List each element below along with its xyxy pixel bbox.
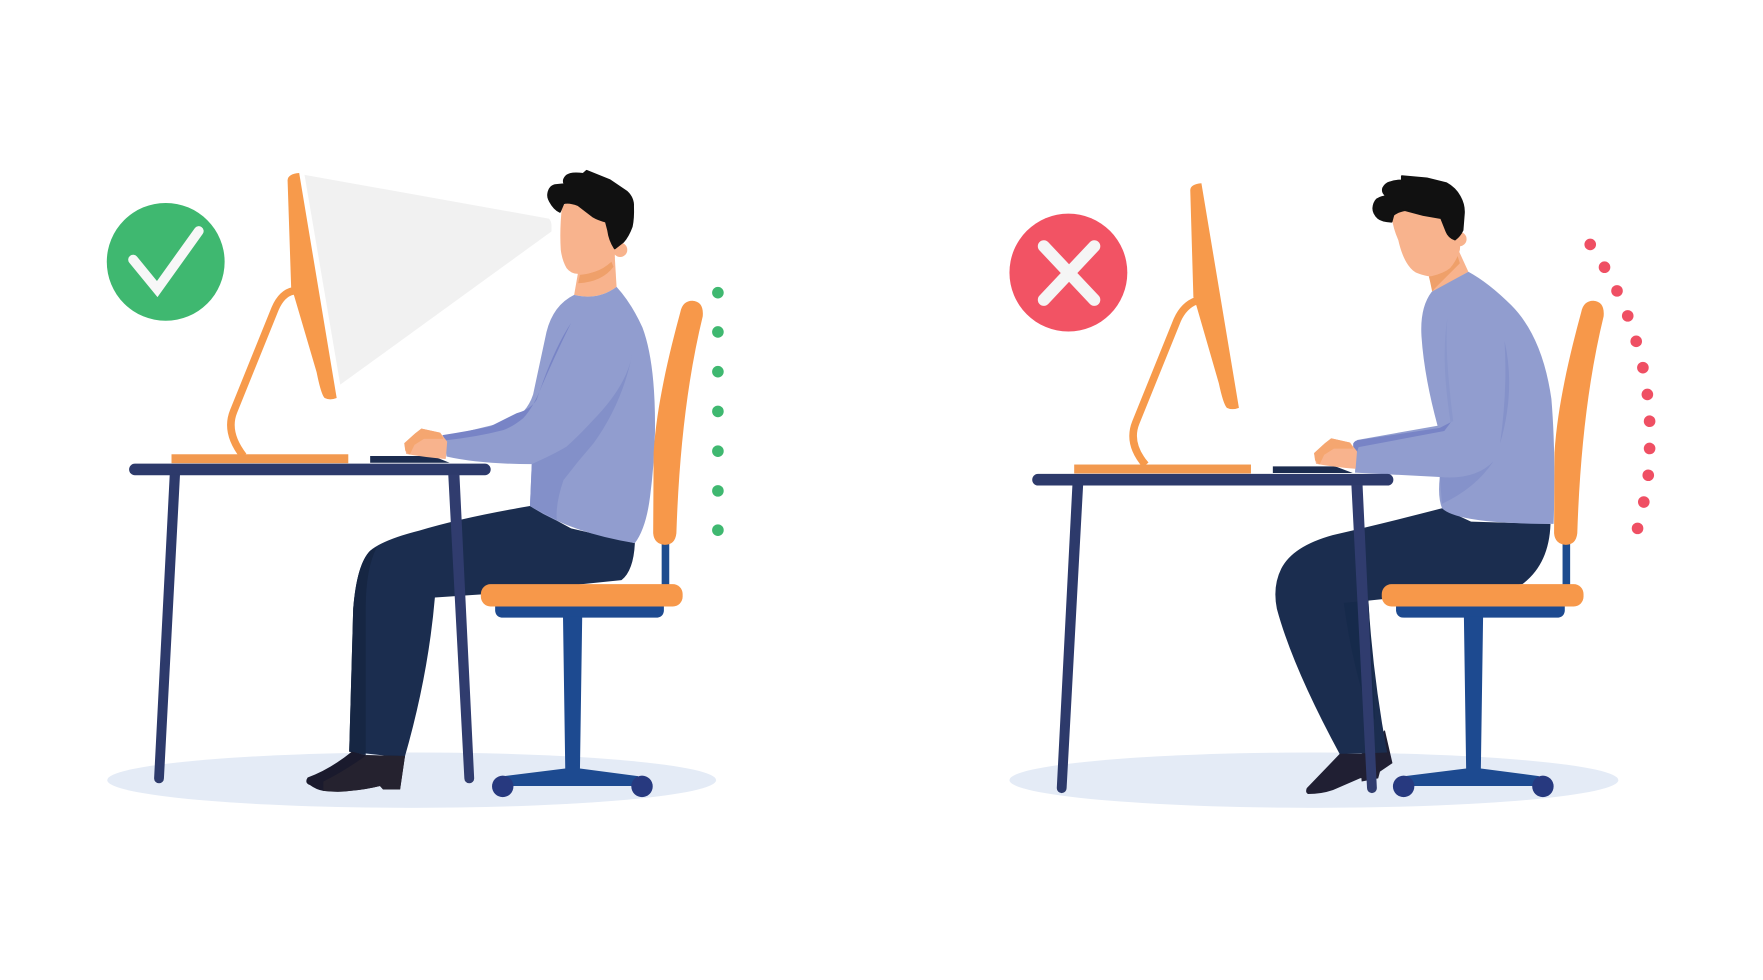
panel: incorrect posture bbox=[1009, 176, 1655, 808]
desk bbox=[129, 464, 491, 783]
office chair bbox=[1382, 301, 1604, 797]
sleeve shade bbox=[442, 323, 571, 440]
face bbox=[1392, 198, 1462, 276]
hair bbox=[548, 171, 633, 248]
hair bbox=[1373, 176, 1464, 240]
front shoe bbox=[1306, 754, 1378, 794]
neck shadow bbox=[1429, 253, 1460, 292]
shirt bbox=[1355, 272, 1554, 524]
keyboard bbox=[1273, 466, 1353, 473]
seated person, upright bbox=[306, 171, 655, 792]
shaded far leg bbox=[349, 547, 377, 755]
gaze cone from eyes to screen bbox=[305, 175, 552, 385]
sleeve shade bbox=[1353, 422, 1451, 452]
hands bbox=[1315, 439, 1356, 468]
icon: red cross badge bbox=[1009, 214, 1127, 332]
curved spine dots bbox=[1584, 239, 1655, 534]
shirt bbox=[444, 287, 655, 543]
keyboard bbox=[370, 456, 450, 463]
ground shadow bbox=[107, 752, 716, 808]
torso shade bbox=[530, 354, 632, 520]
far shoe bbox=[1359, 730, 1392, 781]
face bbox=[560, 198, 616, 274]
ear bbox=[613, 243, 627, 257]
torso shade bbox=[1440, 461, 1493, 504]
front shoe bbox=[323, 755, 405, 792]
computer monitor bbox=[172, 173, 348, 463]
panel: correct posture bbox=[107, 171, 724, 808]
ground shadow bbox=[1009, 752, 1618, 808]
trousers bbox=[1275, 508, 1550, 754]
hands bbox=[405, 429, 446, 458]
seated person, slouching bbox=[1275, 176, 1554, 794]
shaded far leg bbox=[1344, 601, 1375, 720]
shoes bbox=[306, 752, 405, 792]
desk bbox=[1032, 474, 1393, 793]
office chair bbox=[481, 301, 703, 797]
neck shadow bbox=[578, 260, 613, 283]
neck bbox=[574, 257, 617, 297]
icon: green check badge bbox=[107, 203, 225, 321]
neck bbox=[1426, 249, 1468, 292]
computer monitor bbox=[1074, 183, 1251, 473]
ear bbox=[1452, 232, 1467, 246]
straight spine dots bbox=[712, 287, 724, 536]
trousers bbox=[349, 506, 635, 758]
